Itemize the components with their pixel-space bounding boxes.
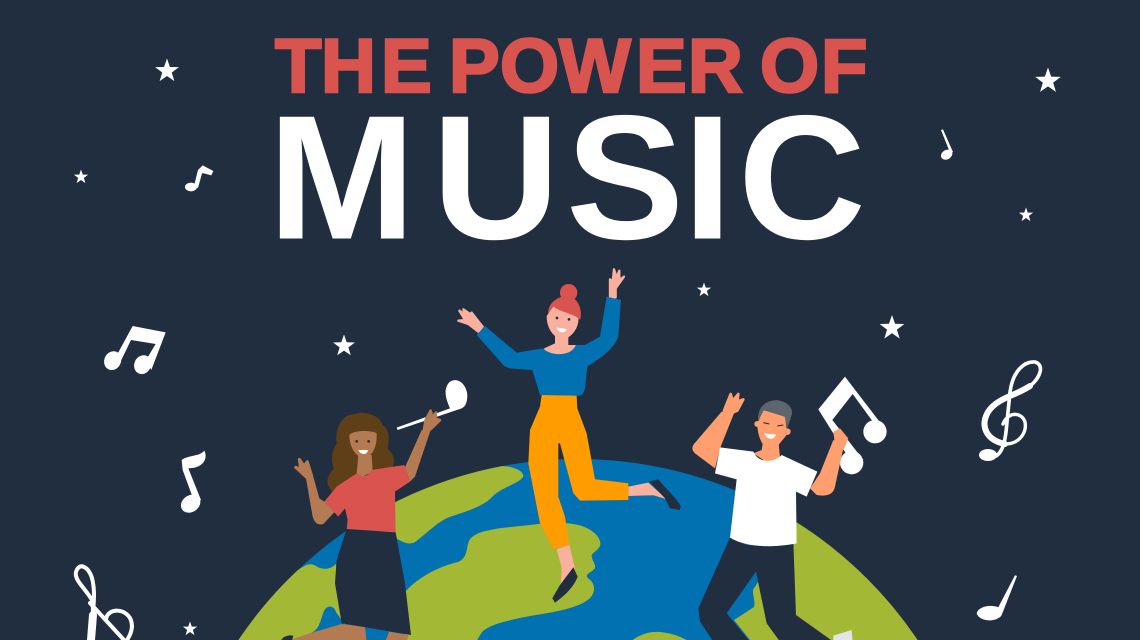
title: the power of: THE POWER OF	[275, 24, 867, 109]
face	[757, 410, 787, 449]
neck	[753, 440, 780, 463]
hair	[758, 400, 792, 428]
hand left	[458, 309, 483, 332]
figure: man right	[692, 377, 887, 640]
shoes	[552, 479, 681, 603]
icon: flag note	[177, 451, 206, 516]
eyes and smile	[355, 440, 358, 443]
note on stick	[397, 380, 467, 430]
icon: beamed notes	[101, 326, 166, 377]
shoe	[282, 635, 293, 640]
shirt	[324, 465, 410, 532]
ocean	[238, 459, 918, 640]
hair	[328, 413, 394, 493]
continent: centre	[405, 523, 600, 640]
sweater	[477, 297, 621, 396]
icon: small eighth note left	[185, 165, 213, 191]
eyes and smile	[556, 317, 558, 319]
icon: small quarter note right	[939, 129, 954, 162]
lower leg and foot	[557, 483, 667, 585]
hair	[548, 296, 581, 319]
figure: woman left	[282, 380, 467, 640]
legs	[290, 624, 408, 640]
title: music: MUSIC	[268, 78, 866, 276]
figure: woman centre	[458, 269, 681, 603]
hand left	[296, 459, 312, 478]
hand left	[724, 394, 743, 413]
face	[547, 307, 578, 339]
icon: treble clef left	[76, 566, 132, 640]
pants	[528, 395, 628, 549]
shirt	[715, 447, 817, 546]
arm right	[405, 430, 431, 482]
arm right	[810, 440, 844, 496]
shoe	[833, 630, 853, 640]
skirt	[335, 529, 411, 635]
globe	[238, 459, 918, 640]
continent: upper left	[375, 466, 523, 544]
eyes and smile	[763, 423, 783, 426]
icon: quarter note bottom right	[977, 575, 1017, 620]
ear	[754, 421, 760, 427]
neck	[357, 455, 373, 477]
stars	[74, 58, 1061, 635]
ear right	[784, 428, 791, 435]
arm left	[692, 412, 734, 468]
bun	[560, 284, 577, 301]
face	[349, 431, 377, 459]
hand right	[610, 269, 624, 297]
music note held	[818, 377, 887, 474]
icon: treble clef right	[979, 362, 1040, 461]
continent: lower left	[230, 564, 345, 640]
hand right	[424, 411, 440, 431]
lake	[312, 606, 344, 633]
pants	[698, 538, 833, 640]
continent: bottom centre	[630, 632, 690, 640]
arm left	[306, 477, 335, 524]
hand right	[833, 428, 848, 450]
neck	[544, 332, 576, 357]
continent: right	[734, 522, 918, 640]
